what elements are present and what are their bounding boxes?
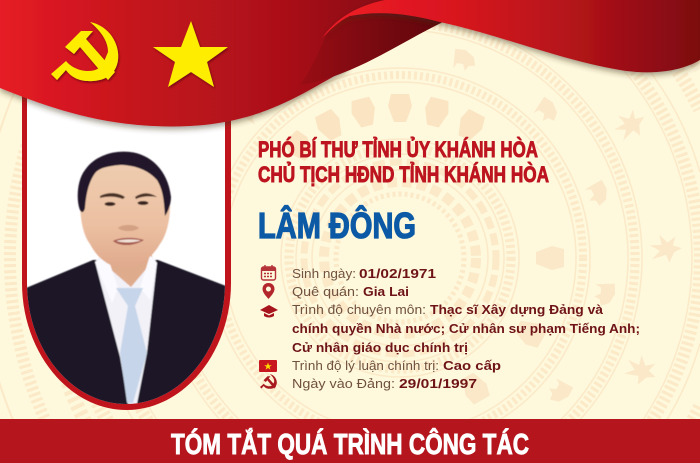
personal information [292,267,640,391]
heading: name: LÂM ĐÔNG [258,204,416,246]
portrait photo [26,152,226,410]
personal information: Gia Lai [363,285,409,299]
right ribbon [322,0,700,72]
personal information: Cao cấp [443,359,501,373]
personal information: Trình độ lý luận chính trị: [292,359,439,373]
header ribbon [0,0,700,126]
heading: position: PHÓ BÍ THƯ TỈNH ỦY KHÁNH HÒA [258,137,538,162]
icon: flag [259,360,277,372]
footer banner: TÓM TẮT QUÁ TRÌNH CÔNG TÁC [171,427,529,461]
footer banner [0,419,700,463]
personal information: chính quyền Nhà nước; Cử nhân sư phạm Tiếng Anh; [292,322,640,336]
icon: hammer and sickle [51,22,118,81]
personal information: Cử nhân giáo dục chính trị [292,341,468,355]
icon: calendar [262,265,276,280]
personal information: Sinh ngày: [292,267,356,281]
portrait card [22,80,231,410]
icon: location pin [262,283,274,299]
personal information: Ngày vào Đảng: [292,377,395,391]
personal information: 29/01/1997 [399,377,477,391]
heading: position [258,137,549,187]
icon: graduation cap [260,305,278,318]
heading: position: CHỦ TỊCH HĐND TỈNH KHÁNH HÒA [258,162,549,187]
personal information: Trình độ chuyên môn: [292,303,426,317]
dark ribbon fold [300,11,443,85]
personal information: Quê quán: [292,285,359,299]
personal information: 01/02/1971 [359,267,436,281]
icon: small hammer and sickle [260,374,277,389]
icon: star [153,21,228,87]
personal information: Thạc sĩ Xây dựng Đảng và [430,303,603,317]
